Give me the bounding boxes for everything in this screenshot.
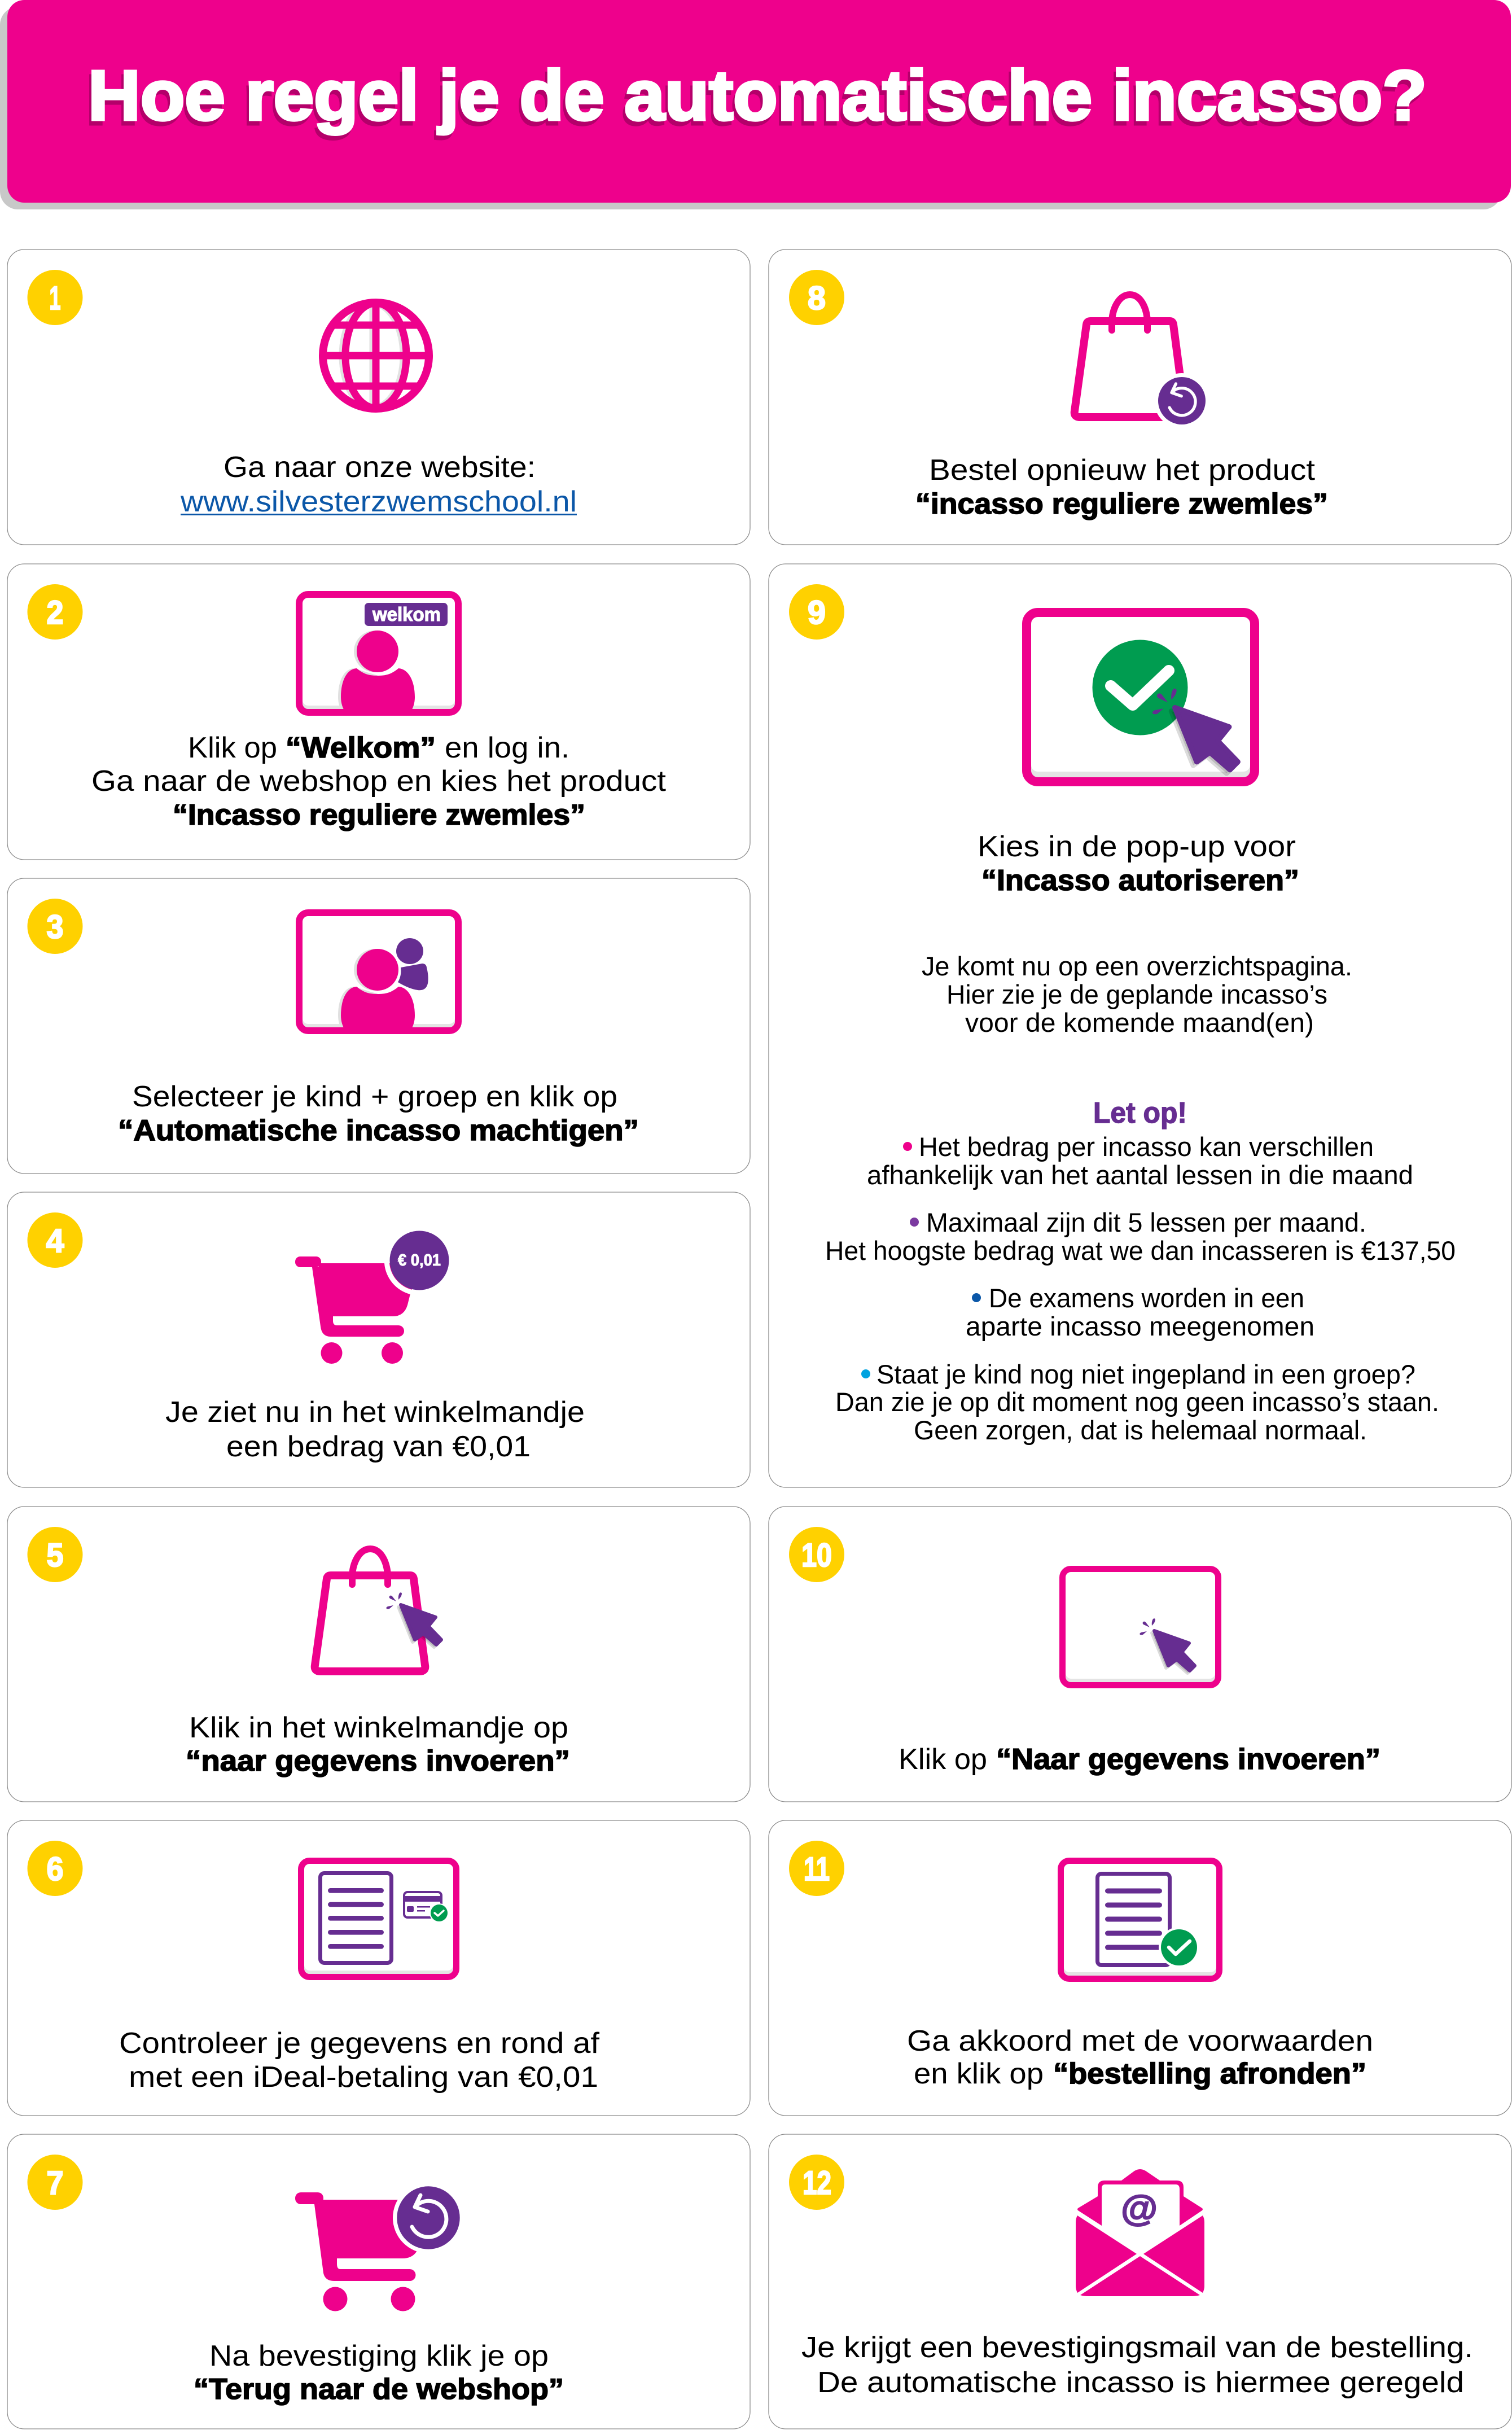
title: Hoe regel je de automatische incasso? xyxy=(88,56,1427,135)
step 4 text: een bedrag van €0,01 xyxy=(226,1430,531,1463)
step 11 text: en klik op xyxy=(914,2057,1044,2090)
overview note: Je komt nu op een overzichtspagina. xyxy=(922,951,1352,981)
step 2 text: “Welkom” xyxy=(286,732,436,764)
step 12 text: Je krijgt een bevestigingsmail van de bestelling. xyxy=(801,2331,1473,2364)
step 7 text xyxy=(194,2340,564,2406)
overview note: Hier zie je de geplande incasso’s xyxy=(946,979,1327,1009)
icon: monitor with document and payment card xyxy=(301,1860,456,1977)
step 6 text xyxy=(119,2027,600,2094)
badge 5 xyxy=(27,1527,82,1582)
badge 6 xyxy=(27,1841,82,1896)
step 2 text: en log in. xyxy=(445,732,569,764)
step 12 text xyxy=(801,2331,1473,2399)
step 2 text xyxy=(91,732,667,831)
panel: step 7 xyxy=(7,2134,750,2429)
heading: let op: Let op! xyxy=(1093,1097,1187,1129)
step 8 text: “incasso reguliere zwemles” xyxy=(915,488,1328,520)
icon: globe xyxy=(321,303,429,409)
step 3 text xyxy=(118,1080,639,1147)
panel: step 3 xyxy=(7,878,750,1174)
badge 2 xyxy=(27,584,82,640)
bullet note: geen groep: Dan zie je op dit moment nog geen incasso’s staan. xyxy=(835,1387,1439,1417)
icon: monitor with cursor xyxy=(1062,1569,1218,1685)
badge 10 xyxy=(789,1527,844,1582)
panel: step 5 xyxy=(7,1507,750,1802)
badge 3: 3 xyxy=(46,909,63,945)
badge 10: 10 xyxy=(801,1537,832,1574)
badge 12: 12 xyxy=(803,2165,831,2201)
bullet note: maximaal xyxy=(825,1207,1456,1266)
badge 3 xyxy=(27,899,82,954)
step 7 text: Na bevestiging klik je op xyxy=(209,2340,549,2372)
badge 1: 1 xyxy=(50,280,61,317)
icon: open envelope: @ xyxy=(1121,2188,1158,2228)
icon: monitor with check and cursor xyxy=(1027,612,1255,782)
badge 1 xyxy=(27,270,82,325)
step 11 text: “bestelling afronden” xyxy=(1053,2057,1366,2090)
badge 4: 4 xyxy=(46,1223,64,1259)
panel: step 4 xyxy=(7,1192,750,1487)
badge 7 xyxy=(27,2155,82,2210)
step 7 text: “Terug naar de webshop” xyxy=(194,2373,564,2406)
bullet note: bedrag xyxy=(867,1132,1413,1190)
step 4 text: Je ziet nu in het winkelmandje xyxy=(165,1396,585,1429)
badge 5: 5 xyxy=(46,1537,63,1574)
icon: monitor with person xyxy=(299,594,458,712)
panel: step 10 xyxy=(769,1507,1511,1802)
step 5 text xyxy=(186,1711,570,1777)
link: www.silvesterzwemschool.nl xyxy=(180,485,577,518)
step 11 text xyxy=(907,2025,1373,2090)
badge 8: 8 xyxy=(808,280,826,317)
bullet note: examens xyxy=(966,1283,1314,1341)
badge 12 xyxy=(789,2155,844,2210)
badge 11 xyxy=(789,1841,844,1896)
icon: monitor with document and check xyxy=(1061,1860,1219,1979)
step 8 text: Bestel opnieuw het product xyxy=(929,454,1316,487)
badge 11: 11 xyxy=(804,1851,830,1888)
icon: open envelope xyxy=(1076,2169,1204,2296)
icon: cart with price: € 0,01 xyxy=(398,1251,441,1269)
panel: step 8 xyxy=(769,249,1511,545)
step 12 text: De automatische incasso is hiermee geregeld xyxy=(817,2366,1464,2399)
icon: monitor with parent and child xyxy=(299,913,458,1031)
step 1 text: Ga naar onze website: xyxy=(223,451,536,484)
bullet note: maximaal: Het hoogste bedrag wat we dan incasseren is €137,50 xyxy=(825,1236,1456,1266)
step 2 text: Klik op xyxy=(188,732,277,764)
bullet note: geen groep: Staat je kind nog niet ingepland in een groep? xyxy=(876,1359,1415,1389)
badge 2: 2 xyxy=(46,594,63,631)
panel: step 1 xyxy=(7,249,750,545)
icon: shopping bag with cursor xyxy=(315,1549,441,1671)
step 2 text: “Incasso reguliere zwemles” xyxy=(173,799,585,831)
badge 9 xyxy=(789,584,844,640)
icon: shopping bag with restart arrow xyxy=(1075,295,1209,428)
step 8 text xyxy=(915,454,1328,520)
panel: step 6 xyxy=(7,1820,750,2116)
overview note: voor de komende maand(en) xyxy=(965,1008,1314,1037)
step 10 text: Klik op xyxy=(899,1743,987,1776)
step 2 text: Ga naar de webshop en kies het product xyxy=(91,765,667,798)
badge 8 xyxy=(789,270,844,325)
icon: monitor with person: welkom xyxy=(372,604,441,625)
step 11 text: Ga akkoord met de voorwaarden xyxy=(907,2025,1373,2057)
bullet note: geen groep xyxy=(835,1359,1439,1445)
step 6 text: Controleer je gegevens en rond af xyxy=(119,2027,600,2060)
header banner xyxy=(0,0,1511,209)
step 5 text: Klik in het winkelmandje op xyxy=(189,1711,568,1744)
step 9 text: “Incasso autoriseren” xyxy=(981,864,1299,897)
panel: step 12 xyxy=(769,2134,1511,2429)
bullet note: maximaal: Maximaal zijn dit 5 lessen per maand. xyxy=(926,1207,1366,1237)
step 9 text: Kies in de pop-up voor xyxy=(978,830,1296,863)
step 5 text: “naar gegevens invoeren” xyxy=(186,1745,570,1777)
bullet note: bedrag: afhankelijk van het aantal lessen in die maand xyxy=(867,1160,1413,1190)
panel: step 9 xyxy=(769,564,1511,1487)
bullet note: examens: De examens worden in een xyxy=(989,1283,1304,1313)
icon: cart with restart arrow xyxy=(295,2182,464,2311)
bullet note: geen groep: Geen zorgen, dat is helemaal normaal. xyxy=(914,1415,1367,1445)
bullet note: examens: aparte incasso meegenomen xyxy=(966,1311,1314,1341)
badge 9: 9 xyxy=(808,594,826,631)
step 3 text: “Automatische incasso machtigen” xyxy=(118,1114,639,1147)
step 10 text: “Naar gegevens invoeren” xyxy=(996,1743,1380,1776)
overview note xyxy=(922,951,1352,1037)
icon: cart with price xyxy=(295,1231,449,1364)
badge 6: 6 xyxy=(46,1851,63,1888)
panel: step 2 xyxy=(7,564,750,860)
panel: step 11 xyxy=(769,1820,1511,2116)
step 3 text: Selecteer je kind + groep en klik op xyxy=(132,1080,617,1113)
step 9 text xyxy=(978,830,1299,897)
badge 7: 7 xyxy=(46,2165,63,2201)
bullet note: bedrag: Het bedrag per incasso kan verschillen xyxy=(919,1132,1374,1162)
badge 4 xyxy=(27,1212,82,1268)
step 4 text xyxy=(165,1396,585,1463)
step 6 text: met een iDeal-betaling van €0,01 xyxy=(129,2061,598,2094)
